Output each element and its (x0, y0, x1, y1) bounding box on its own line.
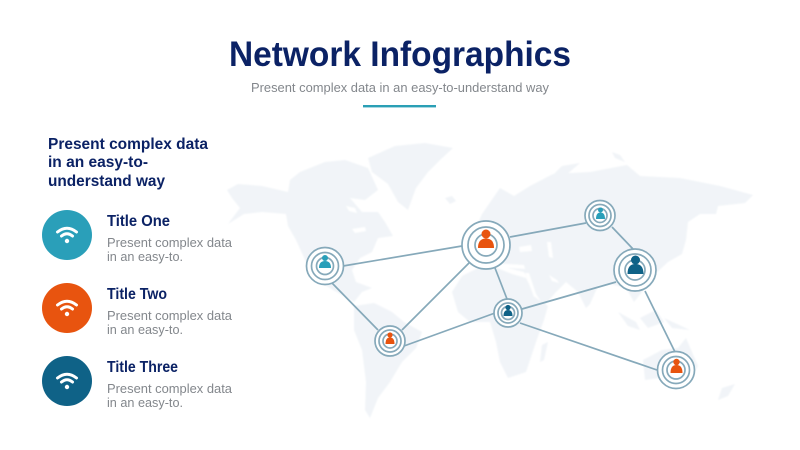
description three: Present complex data (107, 382, 232, 396)
side heading: understand way (48, 173, 165, 190)
title underline (363, 105, 436, 107)
heading: Title One: Title One (107, 213, 170, 230)
title: Network Infographics (229, 35, 571, 74)
description two: in an easy-to. (107, 323, 183, 337)
item: Title Three (42, 356, 232, 410)
icon: wifi teal (42, 210, 92, 260)
subtitle: Present complex data in an easy-to-understand way (251, 81, 550, 95)
description three (107, 382, 232, 410)
description one: Present complex data (107, 236, 232, 250)
item: Title One (42, 210, 232, 264)
description one (107, 236, 232, 264)
node: South America (375, 326, 405, 356)
heading: Title Two: Title Two (107, 286, 167, 303)
world map (227, 143, 753, 418)
side heading: in an easy-to- (48, 154, 148, 171)
node: Asia (614, 249, 656, 291)
node: North America (306, 248, 344, 284)
node: Russia (585, 200, 615, 230)
description two (107, 309, 232, 337)
node: Australia (658, 352, 694, 388)
side heading (48, 136, 208, 190)
network links (332, 223, 675, 370)
description three: in an easy-to. (107, 396, 183, 410)
node: Europe (462, 221, 510, 269)
icon: wifi orange (42, 283, 92, 333)
description two: Present complex data (107, 309, 232, 323)
description one: in an easy-to. (107, 250, 183, 264)
node: Africa (494, 299, 522, 327)
side heading: Present complex data (48, 136, 208, 153)
item: Title Two (42, 283, 232, 337)
heading: Title Three: Title Three (107, 359, 178, 376)
icon: wifi dark blue (42, 356, 92, 406)
